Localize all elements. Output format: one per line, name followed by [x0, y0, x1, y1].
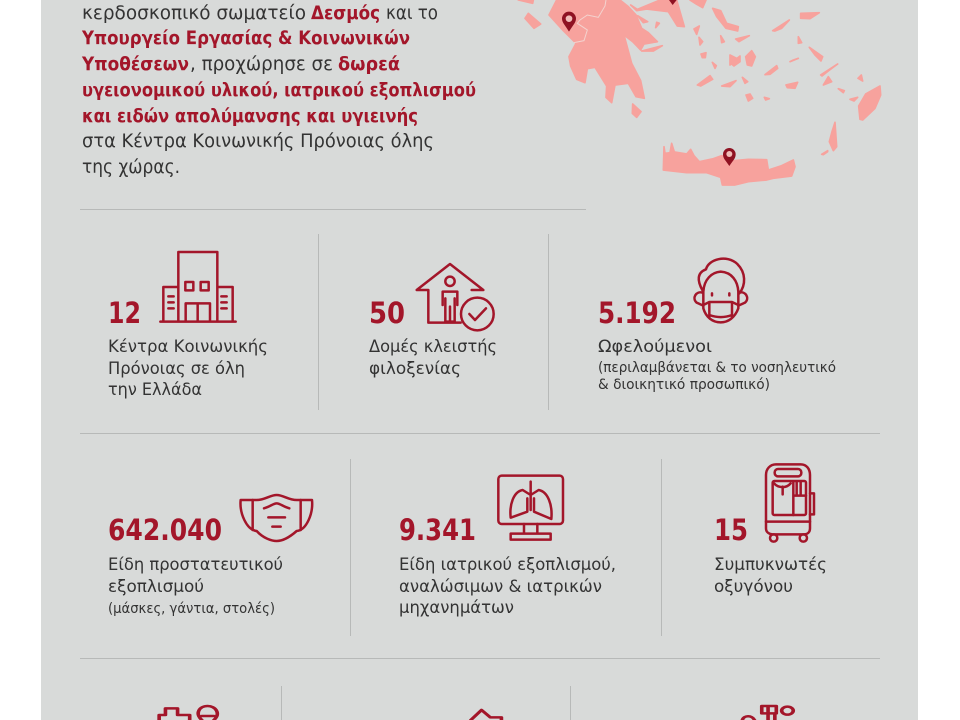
icon: face mask: [241, 495, 312, 541]
icon: building: [160, 252, 236, 322]
stat: 642.040 protective items: (μάσκες, γάντια, στολές): [108, 601, 275, 617]
stat: 5.192 beneficiaries: (περιλαμβάνεται & το νοσηλευτικό: [598, 360, 836, 376]
stat: 5.192 beneficiaries: 5.192: [598, 296, 676, 330]
intro text block: και ειδών απολύμανσης και υγιεινής: [82, 105, 418, 127]
stat: 642.040 protective items: 642.040: [108, 513, 222, 547]
intro text block: [81, 2, 476, 178]
stat: 12 social welfare centres: Πρόνοιας σε όλη: [108, 359, 245, 379]
stat: 5.192 beneficiaries: [598, 259, 836, 393]
intro text block: υγειονομικού υλικού, ιατρικού εξοπλισμού: [82, 79, 476, 101]
icon: sanitiser (cropped, right): [742, 706, 793, 720]
stat: 9.341 medical equipment items: μηχανημάτων: [399, 598, 514, 618]
stat: 642.040 protective items: Είδη προστατευτικού: [108, 555, 283, 575]
stat: 12 social welfare centres: Κέντρα Κοινωνικής: [108, 337, 268, 357]
stat: 50 closed care structures: Δομές κλειστής: [369, 337, 497, 357]
intro text block: Υπουργείο Εργασίας & Κοινωνικών: [81, 27, 410, 49]
intro text block: δωρεά: [338, 53, 400, 75]
icon: monitor with lungs: [498, 476, 563, 540]
map of Greece: [518, 0, 881, 185]
intro text block: Δεσμός: [311, 2, 380, 24]
intro text block: στα Κέντρα Κοινωνικής Πρόνοιας όλης: [82, 130, 434, 152]
stat: 50 closed care structures: [369, 264, 497, 379]
stat: 15 oxygen concentrators: [714, 464, 827, 597]
stat: 50 closed care structures: φιλοξενίας: [369, 359, 461, 379]
intro text block: της χώρας.: [82, 156, 180, 178]
stat: 9.341 medical equipment items: [399, 476, 616, 618]
stat: 12 social welfare centres: την Ελλάδα: [108, 380, 202, 400]
stat: 642.040 protective items: εξοπλισμού: [108, 577, 204, 597]
icon: face with mask: [694, 259, 747, 322]
stat: 642.040 protective items: [108, 495, 312, 617]
stat: 15 oxygen concentrators: Συμπυκνωτές: [714, 555, 827, 575]
stat: 12 social welfare centres: [108, 252, 268, 400]
stat: 15 oxygen concentrators: οξυγόνου: [714, 577, 793, 597]
icon: supplies (cropped, left): [159, 706, 217, 720]
stat: 9.341 medical equipment items: Είδη ιατρικού εξοπλισμού,: [399, 555, 616, 575]
stat: 9.341 medical equipment items: αναλώσιμων & ιατρικών: [399, 577, 602, 597]
intro text block: Υποθέσεων: [81, 53, 189, 75]
icon: house with person and check: [417, 264, 494, 330]
stat: 50 closed care structures: 50: [369, 296, 405, 330]
icon: oxygen concentrator: [766, 464, 814, 542]
intro text block: , προχώρησε σε: [190, 53, 333, 75]
stat: 5.192 beneficiaries: Ωφελούμενοι: [598, 337, 712, 357]
stat: 15 oxygen concentrators: 15: [714, 513, 748, 547]
stat: 5.192 beneficiaries: & διοικητικό προσωπικό): [598, 377, 770, 393]
icon: package (cropped, middle): [471, 710, 501, 720]
icon: map pins: [562, 0, 736, 166]
intro text block: και το: [386, 2, 438, 24]
intro text block: κερδοσκοπικό σωματείο: [82, 2, 306, 24]
dividers: [80, 210, 880, 720]
stat: 9.341 medical equipment items: 9.341: [399, 513, 476, 547]
stat: 12 social welfare centres: 12: [108, 296, 141, 330]
